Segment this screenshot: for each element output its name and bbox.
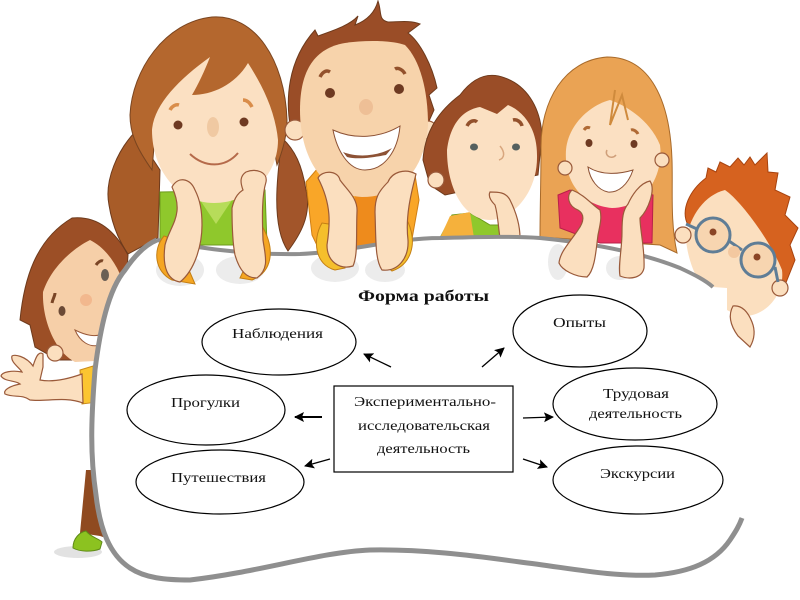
character: girl with brown pigtails <box>108 17 308 254</box>
boy arms <box>316 171 416 271</box>
node: Наблюдения: Наблюдения <box>232 326 323 341</box>
ears <box>285 120 437 140</box>
glasses boy hand <box>730 306 754 347</box>
character: smiling boy <box>285 1 437 262</box>
pigtails <box>108 132 308 254</box>
arm shadows <box>156 244 634 286</box>
arrow to Прогулки <box>295 416 322 418</box>
panel outline <box>92 237 742 580</box>
central box: research activity: исследовательская <box>358 418 490 433</box>
central box: research activity: Экспериментально- <box>354 394 497 409</box>
node: Экскурсии <box>553 446 723 514</box>
face <box>152 57 278 203</box>
node: Опыты <box>513 295 647 367</box>
node: Путешествия: Путешествия <box>171 470 266 485</box>
blonde girl arms <box>559 181 652 278</box>
panel: white board <box>92 237 757 580</box>
arrow to Наблюдения <box>364 354 391 367</box>
character: waving child, left <box>1 218 130 558</box>
arrow to Трудовая деятельность <box>523 417 553 418</box>
node: Трудовая деятельность <box>553 368 717 440</box>
arrow to Путешествия <box>305 459 330 466</box>
node: Опыты: Опыты <box>553 315 606 330</box>
central box: research activity <box>334 386 513 472</box>
arms resting on panel <box>156 170 754 347</box>
character: thinking boy <box>423 75 542 238</box>
node: Трудовая деятельность: деятельность <box>589 406 682 421</box>
orange shirt <box>306 168 419 262</box>
node: Прогулки: Прогулки <box>171 395 240 410</box>
central box: research activity: деятельность <box>377 441 470 456</box>
node: Путешествия <box>136 450 304 514</box>
shirt <box>160 190 267 245</box>
character: girl with long blonde hair <box>540 57 677 253</box>
title: Форма работы <box>358 288 490 305</box>
node: Экскурсии: Экскурсии <box>600 466 675 481</box>
girl 1 arms <box>157 170 270 284</box>
face <box>300 41 428 197</box>
arrows from centre to nodes <box>295 348 553 467</box>
hair <box>130 17 287 170</box>
node: Прогулки <box>127 375 285 445</box>
arrow to Опыты <box>482 348 504 367</box>
node: Трудовая деятельность: Трудовая <box>603 386 669 401</box>
arrow to Экскурсии <box>523 459 547 467</box>
pink shirt <box>558 190 653 243</box>
character: boy with glasses <box>675 153 798 316</box>
hair <box>288 1 437 135</box>
smile <box>333 126 400 170</box>
face <box>566 100 661 208</box>
node: Наблюдения <box>202 309 356 375</box>
hair <box>540 57 677 253</box>
